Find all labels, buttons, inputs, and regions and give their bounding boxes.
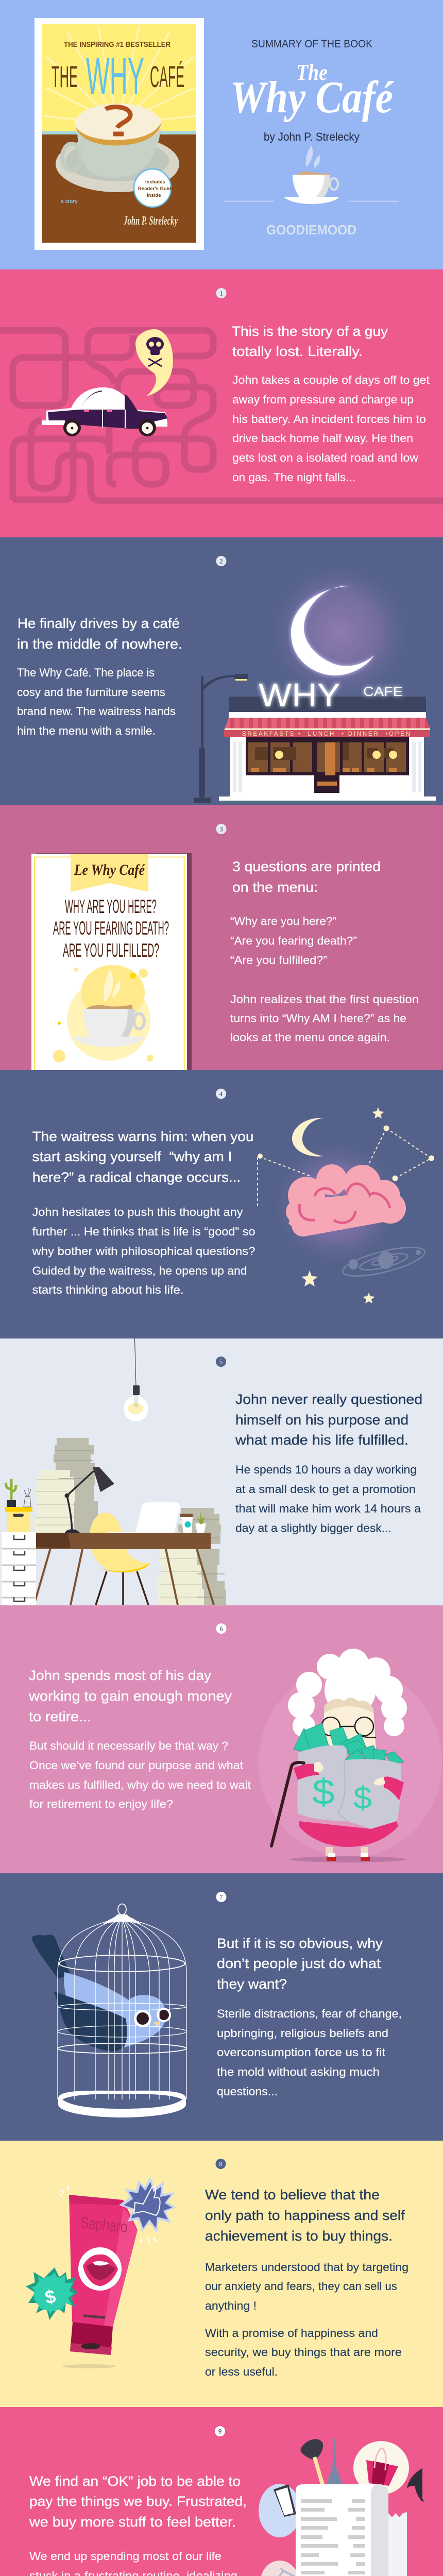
heading bbox=[235, 1392, 422, 1448]
body text: questions: “Are you fulfilled?” bbox=[230, 954, 327, 967]
body text: on gas. The night falls... bbox=[232, 471, 355, 484]
body text bbox=[29, 2550, 241, 2576]
body text: makes us fulfilled, why do we need to wait bbox=[29, 1778, 251, 1791]
number badge 8: 8 bbox=[219, 2160, 223, 2168]
heading: we buy more stuff to feel better. bbox=[29, 2514, 236, 2530]
icon: coffee cup bbox=[224, 145, 399, 204]
menu card bbox=[31, 853, 192, 1070]
panel: 2 the café bbox=[0, 537, 443, 805]
body text: Guided by the waitress, he opens up and bbox=[32, 1264, 247, 1277]
body text: questions: “Why are you here?” bbox=[230, 915, 336, 927]
icon: planets bbox=[340, 1242, 427, 1282]
body text: Once we’ve found our purpose and what bbox=[29, 1759, 243, 1772]
illustration: cosmetic tube: Sapharo bbox=[79, 2213, 129, 2236]
heading: to retire... bbox=[29, 1709, 91, 1724]
panel: 7 the cage bbox=[0, 1873, 443, 2141]
book cover: CAFÉ bbox=[150, 60, 184, 94]
body text: questions: “Are you fearing death?” bbox=[230, 935, 357, 947]
body text: him the menu with a smile. bbox=[17, 724, 156, 737]
book cover: THE bbox=[52, 60, 78, 94]
café building bbox=[219, 676, 436, 804]
heading: in the middle of nowhere. bbox=[17, 636, 182, 652]
heading: achievement is to buy things. bbox=[205, 2228, 393, 2244]
heading bbox=[17, 616, 182, 652]
panel: 9 buying stuff bbox=[0, 2407, 443, 2576]
icon: thumbs-up burst bbox=[119, 2177, 176, 2233]
icon: light bulb bbox=[124, 1338, 148, 1421]
heading: on the menu: bbox=[232, 879, 318, 895]
icon: street lamp bbox=[194, 674, 248, 803]
heading: We find an “OK” job to be able to bbox=[29, 2473, 241, 2489]
body text: his battery. An incident forces him to bbox=[232, 413, 426, 426]
heading: John spends most of his day bbox=[29, 1668, 212, 1683]
body text: for retirement to enjoy life? bbox=[29, 1798, 173, 1810]
number badge 9: 9 bbox=[218, 2428, 222, 2435]
heading: The waitress warns him: when you bbox=[32, 1129, 253, 1144]
book cover: Reader's Guide bbox=[138, 186, 174, 192]
menu card: ARE YOU FEARING DEATH? bbox=[53, 918, 169, 939]
title: The Why Café: Why Café bbox=[230, 73, 395, 123]
café building: WHY bbox=[259, 676, 340, 714]
menu card: WHY ARE YOU HERE? bbox=[65, 896, 157, 917]
heading: they want? bbox=[217, 1976, 287, 1992]
number badge 2 bbox=[216, 556, 227, 566]
illustration: cosmetic tube bbox=[26, 2177, 176, 2368]
heading: himself on his purpose and bbox=[235, 1412, 408, 1428]
illustration: work desk with paper stacks bbox=[2, 1438, 226, 1605]
heading: totally lost. Literally. bbox=[232, 344, 363, 359]
icon: car bbox=[42, 387, 167, 436]
body text: further ... He thinks that is life is “good” so bbox=[32, 1225, 255, 1238]
body text: We end up spending most of our life bbox=[29, 2550, 222, 2563]
body text: away from pressure and charge up bbox=[232, 393, 414, 406]
heading: what made his life fulfilled. bbox=[235, 1432, 408, 1448]
heading: But if it is so obvious, why bbox=[217, 1936, 383, 1951]
moon with glow bbox=[264, 558, 414, 707]
book cover: WHY bbox=[86, 47, 144, 105]
café building: CAFE bbox=[363, 684, 403, 699]
panel: 4 the waitress warning bbox=[0, 1070, 443, 1338]
café building: BREAKFASTS • LUNCH • DINNER •OPEN bbox=[242, 731, 410, 737]
illustration: old lady with money bags bbox=[258, 1649, 443, 1873]
heading: don’t people just do what bbox=[217, 1956, 381, 1971]
heading bbox=[205, 2187, 405, 2244]
title: The Why Café: The bbox=[296, 60, 328, 85]
panel: 1 lost on the road bbox=[0, 269, 443, 537]
body text bbox=[205, 2261, 408, 2378]
number badge 3 bbox=[216, 824, 227, 834]
body text: at a small desk to get a promotion bbox=[235, 1483, 416, 1496]
body text: questions... bbox=[217, 2085, 278, 2098]
body text: questions bbox=[230, 915, 419, 1044]
road maze bbox=[0, 330, 443, 501]
body text: John takes a couple of days off to get bbox=[232, 374, 430, 386]
body text bbox=[31, 1206, 255, 1296]
book cover: Includes bbox=[145, 179, 165, 185]
body text: The Why Café. The place is bbox=[17, 666, 155, 679]
heading: working to gain enough money bbox=[28, 1688, 232, 1704]
heading: This is the story of a guy bbox=[232, 324, 388, 339]
heading: We tend to believe that the bbox=[205, 2187, 380, 2202]
body text bbox=[232, 374, 430, 484]
body text bbox=[235, 1463, 421, 1534]
heading: 3 questions are printed bbox=[232, 859, 381, 874]
number badge 5: 5 bbox=[219, 1358, 223, 1365]
book cover: Inside bbox=[147, 193, 161, 198]
body text: upbringing, religious beliefs and bbox=[217, 2027, 388, 2040]
number badge 7: 7 bbox=[219, 1893, 223, 1901]
body text: questions: looks at the menu once again. bbox=[230, 1031, 390, 1044]
heading bbox=[232, 859, 381, 895]
panel: book header bbox=[0, 0, 443, 269]
icon: speech bubble with skull bbox=[135, 329, 173, 396]
book cover bbox=[35, 18, 204, 250]
body text: John hesitates to push this thought any bbox=[32, 1206, 243, 1218]
book cover: a story bbox=[61, 199, 78, 205]
number badge 4: 4 bbox=[219, 1090, 223, 1097]
body text: He spends 10 hours a day working bbox=[235, 1463, 417, 1476]
number badge 1 bbox=[216, 288, 227, 298]
body text: day at a slightly bigger desk... bbox=[235, 1522, 391, 1534]
body text: security, we buy things that are more bbox=[205, 2346, 402, 2359]
body text bbox=[29, 1739, 251, 1810]
panel: 5 the desk bbox=[0, 1338, 443, 1605]
number badge 3: 3 bbox=[219, 825, 223, 833]
body text: drive back home half way. He then bbox=[232, 432, 413, 445]
heading: only path to happiness and self bbox=[205, 2208, 405, 2223]
heading: pay the things we buy. Frustrated, bbox=[29, 2494, 247, 2509]
body text: anything ! bbox=[205, 2299, 257, 2312]
number badge 1: 1 bbox=[219, 290, 223, 297]
café building: CAFE bbox=[363, 684, 403, 699]
body text: starts thinking about his life. bbox=[32, 1283, 183, 1296]
illustration: old lady with money bags: $ bbox=[312, 1772, 335, 1812]
menu card: ARE YOU FULFILLED? bbox=[63, 940, 159, 961]
heading bbox=[232, 324, 388, 359]
menu card: Le Why Café bbox=[74, 861, 145, 878]
text: summary of the book: SUMMARY OF THE BOOK bbox=[251, 38, 372, 50]
body text: questions: John realizes that the first question bbox=[230, 993, 419, 1006]
body text: that will make him work 14 hours a bbox=[235, 1502, 421, 1515]
body text: With a promise of happiness and bbox=[205, 2327, 378, 2340]
illustration: receipt and purchases bbox=[259, 2438, 423, 2576]
number badge 6 bbox=[216, 1623, 227, 1634]
number badge 6: 6 bbox=[219, 1625, 223, 1632]
body text: why bother with philosophical questions? bbox=[31, 1245, 255, 1258]
body text: But should it necessarily be that way ? bbox=[29, 1739, 228, 1752]
number badge 5 bbox=[216, 1357, 226, 1367]
book cover: John P. Strelecky bbox=[123, 214, 178, 228]
icon: coffee on menu bbox=[53, 965, 154, 1062]
heading bbox=[29, 2473, 247, 2530]
book cover: THE INSPIRING #1 BESTSELLER bbox=[64, 40, 171, 49]
panel: 6 retirement bbox=[0, 1605, 443, 1873]
heading bbox=[28, 1668, 232, 1724]
heading: John never really questioned bbox=[235, 1392, 422, 1407]
number badge 2: 2 bbox=[219, 557, 223, 565]
body text: gets lost on a isolated road and low bbox=[232, 451, 418, 464]
illustration: old lady with money bags: $ bbox=[353, 1781, 372, 1815]
body text: cosy and the furniture seems bbox=[17, 686, 165, 699]
body text: questions: turns into “Why AM I here?” as he bbox=[230, 1012, 406, 1025]
heading: He finally drives by a café bbox=[18, 616, 180, 631]
illustration: bird in cage bbox=[31, 1904, 186, 2117]
number badge 8 bbox=[215, 2159, 226, 2169]
body text: our anxiety and fears, they can sell us bbox=[205, 2280, 397, 2293]
icon: dollar burst: $ bbox=[43, 2285, 58, 2308]
body text bbox=[217, 2007, 402, 2098]
body text bbox=[17, 666, 176, 737]
heading bbox=[32, 1129, 253, 1185]
body text: Marketers understood that by targeting bbox=[205, 2261, 408, 2274]
number badge 4 bbox=[216, 1089, 226, 1099]
heading: here?” a radical change occurs... bbox=[32, 1170, 241, 1185]
panel: 8 marketing bbox=[0, 2141, 443, 2407]
text: author: by John P. Strelecky bbox=[264, 130, 360, 143]
café building: WHY bbox=[259, 676, 340, 714]
body text: overconsumption force us to fit bbox=[217, 2046, 385, 2059]
panel: 3 the menu bbox=[0, 805, 443, 1070]
number badge 9 bbox=[215, 2426, 225, 2436]
body text: brand new. The waitress hands bbox=[17, 705, 176, 718]
logo: goodiemood: GOODIEMOOD bbox=[266, 222, 356, 238]
body text: or less useful. bbox=[205, 2365, 278, 2378]
heading bbox=[217, 1936, 383, 1992]
heading: start asking yourself “why am I bbox=[32, 1149, 232, 1164]
illustration: brain in space bbox=[258, 1107, 434, 1303]
body text: the mold without asking much bbox=[217, 2065, 380, 2078]
number badge 7 bbox=[216, 1892, 227, 1902]
icon: dollar burst bbox=[26, 2267, 77, 2320]
body text: Sterile distractions, fear of change, bbox=[217, 2007, 402, 2020]
